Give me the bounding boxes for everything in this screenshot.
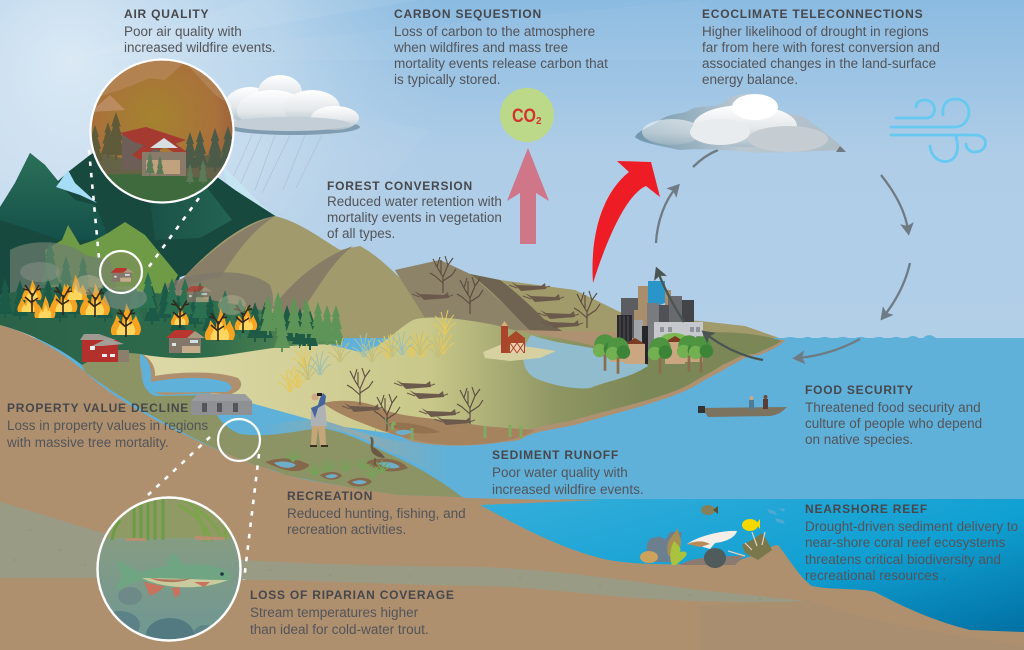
boat with fishers [698, 395, 787, 417]
tan hills [160, 216, 785, 360]
forest band [0, 287, 342, 365]
text: loss of riparian coverage [250, 588, 455, 637]
text: food security: on native species. [805, 432, 913, 447]
mud bank [323, 401, 535, 445]
snow patch [56, 170, 97, 203]
text: recreation: recreation activities. [287, 522, 406, 537]
birdwatcher [310, 393, 328, 446]
text: recreation: Reduced hunting, fishing, and [287, 506, 466, 521]
shore and meadow land [140, 317, 785, 446]
text: sediment runoff: increased wildfire events. [492, 482, 644, 497]
text: carbon sequestion: is typically stored. [394, 72, 501, 87]
CO2 circle [500, 88, 554, 142]
stream [136, 353, 560, 500]
mountains [0, 130, 277, 300]
text: ecoclimate teleconnections: Higher likelihood of drought in regions [702, 24, 929, 39]
text: forest conversion: FOREST CONVERSION [327, 179, 473, 193]
text: property value decline: Loss in property values in regions [7, 418, 208, 433]
text: carbon sequestion: when wildfires and mass tree [393, 40, 568, 55]
text: nearshore reef: NEARSHORE REEF [805, 502, 928, 516]
text: property value decline: PROPERTY VALUE DECLINE [7, 401, 189, 415]
text: air quality: increased wildfire events. [124, 40, 276, 55]
text: nearshore reef: threatens critical biodiversity and [805, 552, 1001, 567]
reef [640, 505, 785, 568]
sediment band [0, 502, 806, 602]
text: property value decline: with massive tree mortality. [6, 435, 169, 450]
text: recreation: RECREATION [287, 489, 373, 503]
text: recreation [287, 489, 466, 537]
text: loss of riparian coverage: LOSS OF RIPARIAN COVERAGE [250, 588, 455, 602]
text: nearshore reef: Drought-driven sediment delivery to [805, 519, 1018, 534]
text: air quality: AIR QUALITY [124, 7, 209, 21]
text: loss of riparian coverage: Stream temperatures higher [250, 605, 419, 620]
barn [501, 321, 525, 353]
text: nearshore reef [805, 502, 1018, 583]
undersea gradient [470, 499, 1024, 644]
text: loss of riparian coverage: than ideal for cold-water trout. [250, 622, 429, 637]
text: nearshore reef: recreational resources . [805, 568, 946, 583]
text: carbon sequestion: CARBON SEQUESTION [394, 7, 542, 21]
CO2 upward arrow [507, 148, 549, 244]
magnified air quality circle [87, 58, 240, 206]
far ridge [395, 260, 785, 345]
brown foreground earth [0, 325, 1024, 650]
bay [483, 335, 648, 388]
text: nearshore reef: near-shore coral reef ecosystems [805, 535, 1006, 550]
goose [370, 437, 385, 465]
magnified trout circle [96, 496, 244, 650]
light wedge behind circle [222, 165, 277, 217]
text: carbon sequestion [393, 7, 608, 87]
text: air quality: Poor air quality with [124, 24, 242, 39]
small circle: house [100, 251, 142, 293]
city [593, 281, 713, 374]
text: carbon sequestion: mortality events release carbon that [394, 56, 608, 71]
text: carbon sequestion: Loss of carbon to the atmosphere [394, 24, 595, 39]
text: food security [805, 383, 982, 447]
text: food security: culture of people who depend [805, 416, 982, 431]
dry grasses [278, 310, 456, 392]
text: forest conversion [327, 179, 502, 241]
text: property value decline [6, 401, 208, 450]
text: forest conversion: Reduced water retention with [327, 194, 502, 209]
CO2 circle: CO [512, 106, 536, 127]
text: air quality [124, 7, 276, 55]
text: food security: Threatened food security and [805, 400, 981, 415]
cycle arrows [656, 150, 910, 360]
text: sediment runoff: SEDIMENT RUNOFF [492, 448, 619, 462]
text: ecoclimate teleconnections: energy balance. [702, 72, 798, 87]
conifer trees [0, 242, 344, 352]
text: sediment runoff [492, 448, 644, 497]
gray building [191, 394, 252, 415]
dead trees and logs [342, 256, 600, 440]
CO2 circle: 2 [536, 116, 542, 127]
cloud with rain [225, 75, 360, 193]
wildfires [17, 262, 257, 341]
red arrow [592, 161, 660, 283]
wind icon [891, 99, 986, 162]
water [0, 335, 1024, 503]
text: ecoclimate teleconnections: associated changes in the land-surface [702, 56, 936, 71]
text: forest conversion: of all types. [327, 226, 395, 241]
text: forest conversion: mortality events in vegetation [327, 210, 502, 225]
riparian meadow [82, 353, 462, 497]
magnifier leader dashes [89, 150, 259, 580]
sky background [0, 0, 1024, 345]
text: ecoclimate teleconnections: far from here with forest conversion and [702, 40, 940, 55]
text: sediment runoff: Poor water quality with [492, 465, 628, 480]
text: ecoclimate teleconnections: ECOCLIMATE TELECONNECTIONS [702, 7, 923, 21]
houses [80, 330, 205, 362]
text: food security: FOOD SECURITY [805, 383, 914, 397]
text: ecoclimate teleconnections [702, 7, 940, 87]
center cloud [635, 94, 846, 153]
small circle: riparian [218, 419, 260, 461]
